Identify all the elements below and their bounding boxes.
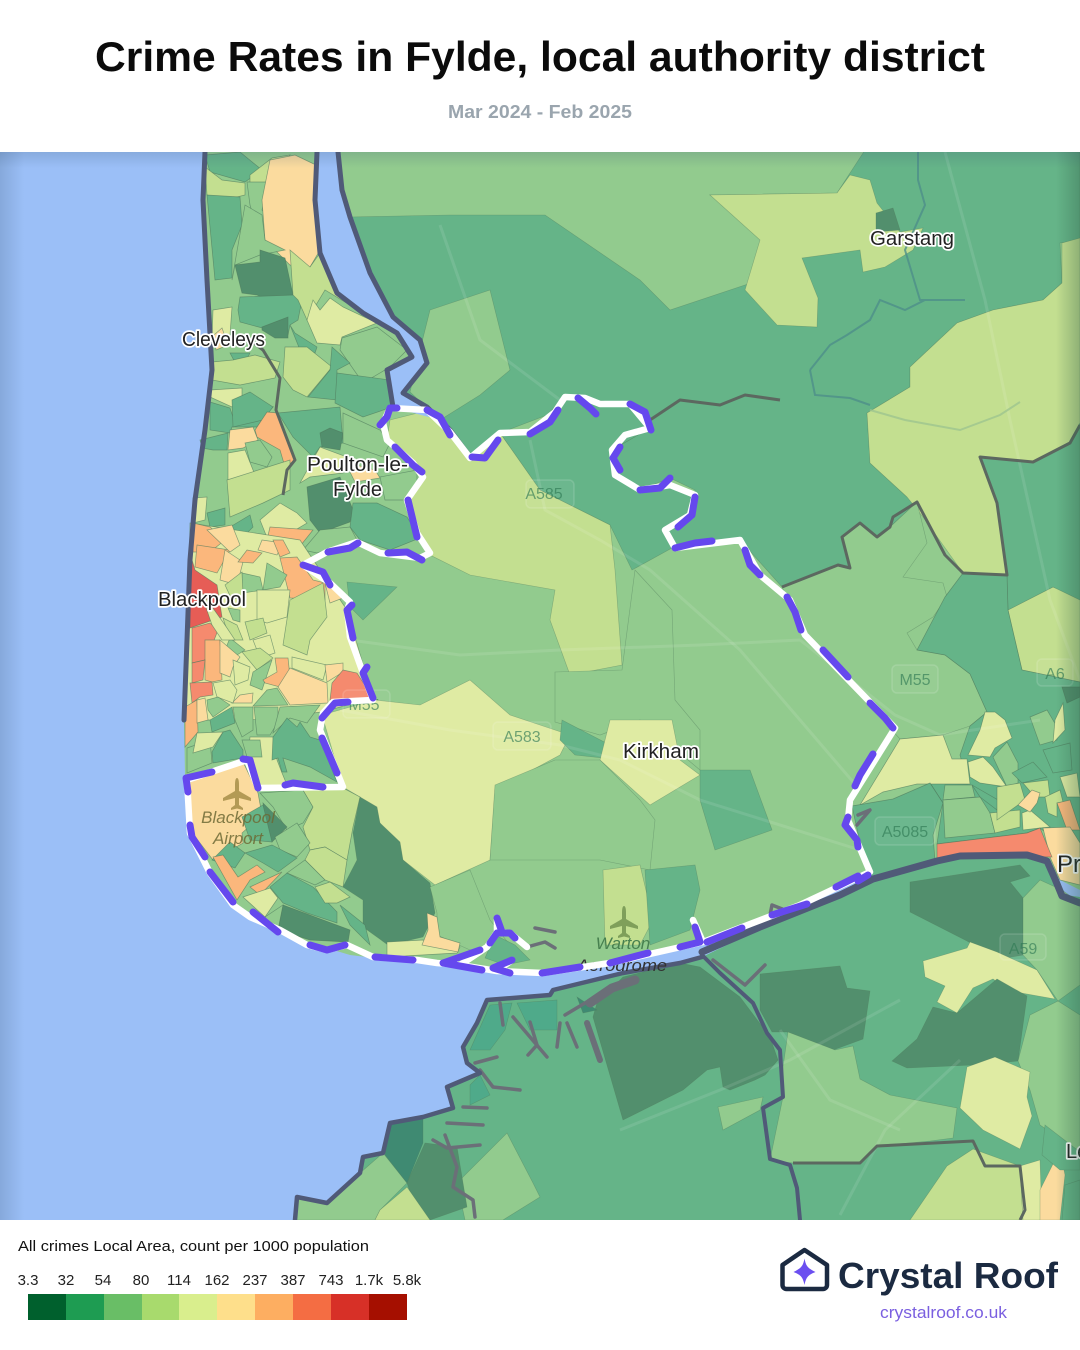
title: Crime Rates in Fylde, local authority district bbox=[95, 33, 985, 80]
airport and aerodrome labels bbox=[201, 808, 667, 975]
icon: Warton Aerodrome plane bbox=[610, 906, 638, 938]
coastline outlines bbox=[184, 152, 1080, 1220]
road labels: A585 bbox=[525, 486, 563, 503]
land south of the Ribble bbox=[295, 856, 1080, 1220]
place label: Cleveleys: Cleveleys bbox=[182, 329, 265, 351]
legend values: 387 bbox=[280, 1272, 306, 1289]
inner administrative boundaries bbox=[250, 340, 1080, 1220]
legend values: 54 bbox=[95, 1272, 111, 1289]
north Fylde coast wards bbox=[193, 152, 420, 557]
road labels: M55 bbox=[899, 672, 931, 689]
airport and aerodrome labels: Airport bbox=[212, 829, 264, 848]
road labels: A5085 bbox=[882, 824, 928, 841]
road labels: M55 bbox=[348, 697, 380, 714]
Wyre estuary bbox=[318, 152, 430, 418]
legend values: 32 bbox=[58, 1272, 74, 1289]
legend values: 80 bbox=[133, 1272, 149, 1289]
road labels: A6 bbox=[1045, 666, 1065, 683]
road labels bbox=[343, 480, 1073, 960]
right-hand zone: Preston fringe bbox=[852, 573, 1080, 885]
legend values: 1.7k bbox=[355, 1272, 384, 1289]
website: crystalroof.co.uk bbox=[880, 1304, 1008, 1322]
place label: Poulton-le-Fylde bbox=[307, 454, 408, 501]
icon: Blackpool Airport plane bbox=[223, 778, 251, 810]
choropleth map bbox=[0, 150, 1080, 1220]
place label: Garstang: Garstang bbox=[870, 228, 954, 250]
icon: house with star bbox=[782, 1250, 827, 1289]
tidal creeks on the Ribble marsh bbox=[433, 810, 870, 1217]
airport and aerodrome labels: Warton bbox=[596, 934, 650, 953]
district boundary: white line bbox=[187, 397, 895, 973]
zones south of the Ribble bbox=[295, 865, 1080, 1220]
map edge shading bbox=[0, 152, 1080, 1220]
land north of the Ribble bbox=[184, 152, 1080, 974]
river courses bbox=[810, 152, 1020, 430]
legend values: 5.8k bbox=[393, 1272, 422, 1289]
legend title: All crimes Local Area, count per 1000 population bbox=[18, 1238, 369, 1255]
airport and aerodrome labels: Blackpool bbox=[201, 808, 276, 827]
road network bbox=[340, 152, 1080, 1215]
place label: Blackpool: Blackpool bbox=[158, 589, 246, 611]
zones north of the district bbox=[350, 150, 1080, 739]
Lytham St Annes wards and airport bbox=[190, 762, 460, 957]
wordmark: Crystal Roof bbox=[838, 1255, 1059, 1296]
road labels: A59 bbox=[1009, 941, 1037, 958]
legend colour scale bbox=[28, 1294, 407, 1320]
Blackpool wards bbox=[185, 523, 373, 790]
legend values: 3.3 bbox=[18, 1272, 38, 1289]
place label: Kirkham: Kirkham bbox=[623, 741, 699, 763]
place label: Poulton-le-Fylde: Poulton-le- bbox=[307, 454, 408, 476]
road labels: A583 bbox=[503, 729, 541, 746]
subtitle: date range: Mar 2024 - Feb 2025 bbox=[448, 101, 632, 122]
legend values: 114 bbox=[167, 1272, 191, 1289]
legend values bbox=[18, 1272, 422, 1289]
sea bbox=[0, 152, 1080, 1220]
legend values: 743 bbox=[318, 1272, 344, 1289]
Crystal Roof logo bbox=[782, 1250, 1059, 1322]
district interior zones bbox=[322, 397, 772, 965]
district boundary: purple dashes bbox=[186, 398, 893, 973]
place label: Poulton-le-Fylde: Fylde bbox=[333, 479, 382, 501]
legend values: 237 bbox=[242, 1272, 268, 1289]
airport and aerodrome labels: Aerodrome bbox=[576, 956, 667, 975]
legend values: 162 bbox=[204, 1272, 230, 1289]
legend bbox=[18, 1238, 422, 1320]
